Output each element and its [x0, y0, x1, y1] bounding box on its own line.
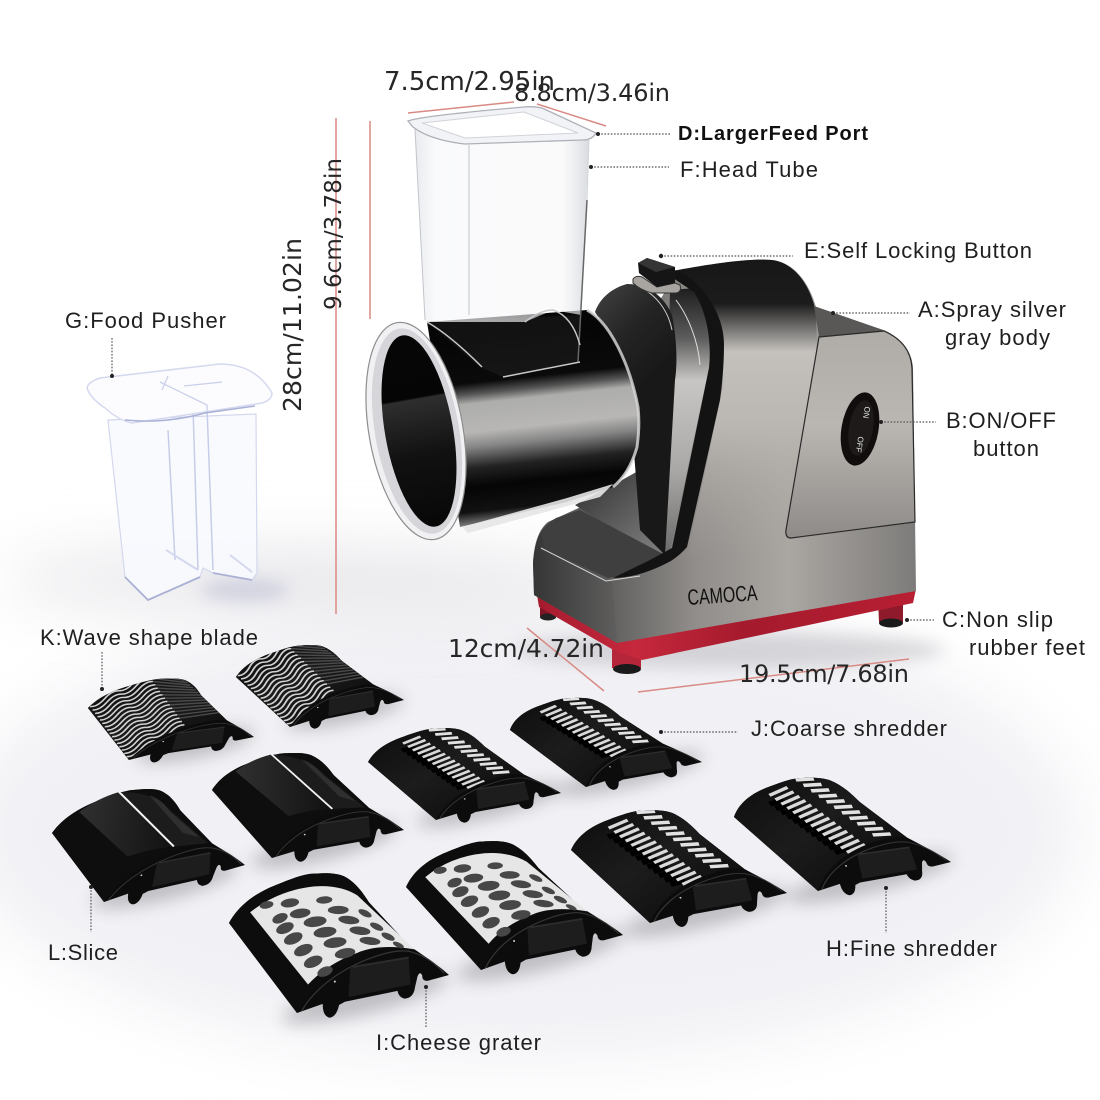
dimension lines — [336, 102, 909, 692]
blade: cheese grater rear — [401, 835, 628, 982]
callout K: wave shape blade: K:Wave shape blade — [40, 625, 258, 650]
side panel — [786, 331, 915, 538]
dimension: base depth: 12cm/4.72in — [448, 634, 604, 663]
drum right clear edge — [587, 310, 639, 487]
callout E: self locking button — [659, 238, 1032, 263]
floor shading — [0, 556, 1080, 1060]
callout B: on off button: button — [973, 436, 1039, 461]
steel body — [533, 260, 916, 643]
clear feed tube — [408, 107, 596, 377]
body shoulder — [814, 306, 886, 337]
food pusher — [87, 364, 272, 600]
strip highlight — [676, 300, 700, 365]
dimension: base width: 19.5cm/7.68in — [739, 660, 909, 688]
self locking button — [633, 258, 680, 293]
dimension: total height: 28cm/11.02in — [278, 238, 307, 412]
blade: slice front — [41, 788, 256, 906]
brand logo: CAMOCA — [687, 580, 758, 610]
callout D: larger feed port: D:LargerFeed Port — [678, 123, 868, 145]
callout C: rubber feet: rubber feet — [969, 635, 1085, 660]
blade: wave shape front — [74, 673, 269, 767]
callout C: rubber feet — [905, 607, 1085, 660]
blade: slice rear — [211, 747, 405, 868]
dimension: tube width: 7.5cm/2.95in — [384, 67, 555, 97]
callout K: wave shape blade — [40, 625, 258, 691]
steel strip — [664, 288, 710, 552]
callout A: body finish: A:Spray silver — [918, 297, 1066, 322]
face edge highlight — [640, 287, 672, 330]
blade: wave shape back — [235, 642, 405, 730]
callout C: rubber feet: C:Non slip — [942, 607, 1053, 632]
dimension: tube depth: 8.8cm/3.46in — [514, 79, 670, 107]
callout A: body finish: gray body — [945, 325, 1050, 350]
rear hood — [678, 260, 817, 590]
blade: coarse shredder front — [363, 725, 566, 826]
blade: cheese grater front — [227, 866, 451, 1026]
on off switch — [835, 389, 885, 469]
callout L: slice: L:Slice — [48, 940, 118, 965]
drum cylinder — [427, 310, 639, 527]
callout G: food pusher: G:Food Pusher — [65, 308, 226, 333]
callout A: body finish — [831, 297, 1066, 350]
left base face — [533, 532, 617, 643]
callout I: cheese grater — [376, 985, 541, 1055]
callout J: coarse shredder: J:Coarse shredder — [751, 716, 947, 741]
callout B: on off button — [879, 408, 1056, 461]
callout E: self locking button: E:Self Locking Button — [804, 238, 1032, 263]
callout L: slice — [48, 885, 118, 965]
blade: fine shredder front — [563, 804, 795, 934]
callout G: food pusher — [65, 308, 226, 378]
clear drum mouth — [351, 315, 481, 547]
food processor machine — [351, 107, 916, 674]
callout F: head tube: F:Head Tube — [680, 157, 818, 182]
blade: fine shredder rear — [722, 771, 962, 903]
under drum plate — [575, 470, 672, 560]
callout H: fine shredder: H:Fine shredder — [826, 936, 997, 961]
lower housing top — [541, 510, 665, 578]
callout F: head tube — [589, 157, 818, 182]
callout B: on off button: B:ON/OFF — [946, 408, 1056, 433]
front dark face — [595, 284, 676, 555]
on off switch: OFF — [854, 436, 865, 453]
black arch band — [613, 270, 724, 578]
blade: coarse shredder rear — [498, 694, 713, 795]
red base — [537, 589, 916, 660]
drum lower clear lip — [462, 484, 613, 533]
callout J: coarse shredder — [659, 716, 947, 741]
on off switch: ON — [861, 406, 872, 419]
callout H: fine shredder — [826, 886, 997, 961]
base highlight line — [541, 548, 640, 581]
callout I: cheese grater: I:Cheese grater — [376, 1030, 541, 1055]
dimension: tube height: 9.6cm/3.78in — [321, 158, 347, 310]
machine feet — [540, 596, 903, 674]
callout D: larger feed port — [596, 123, 868, 145]
